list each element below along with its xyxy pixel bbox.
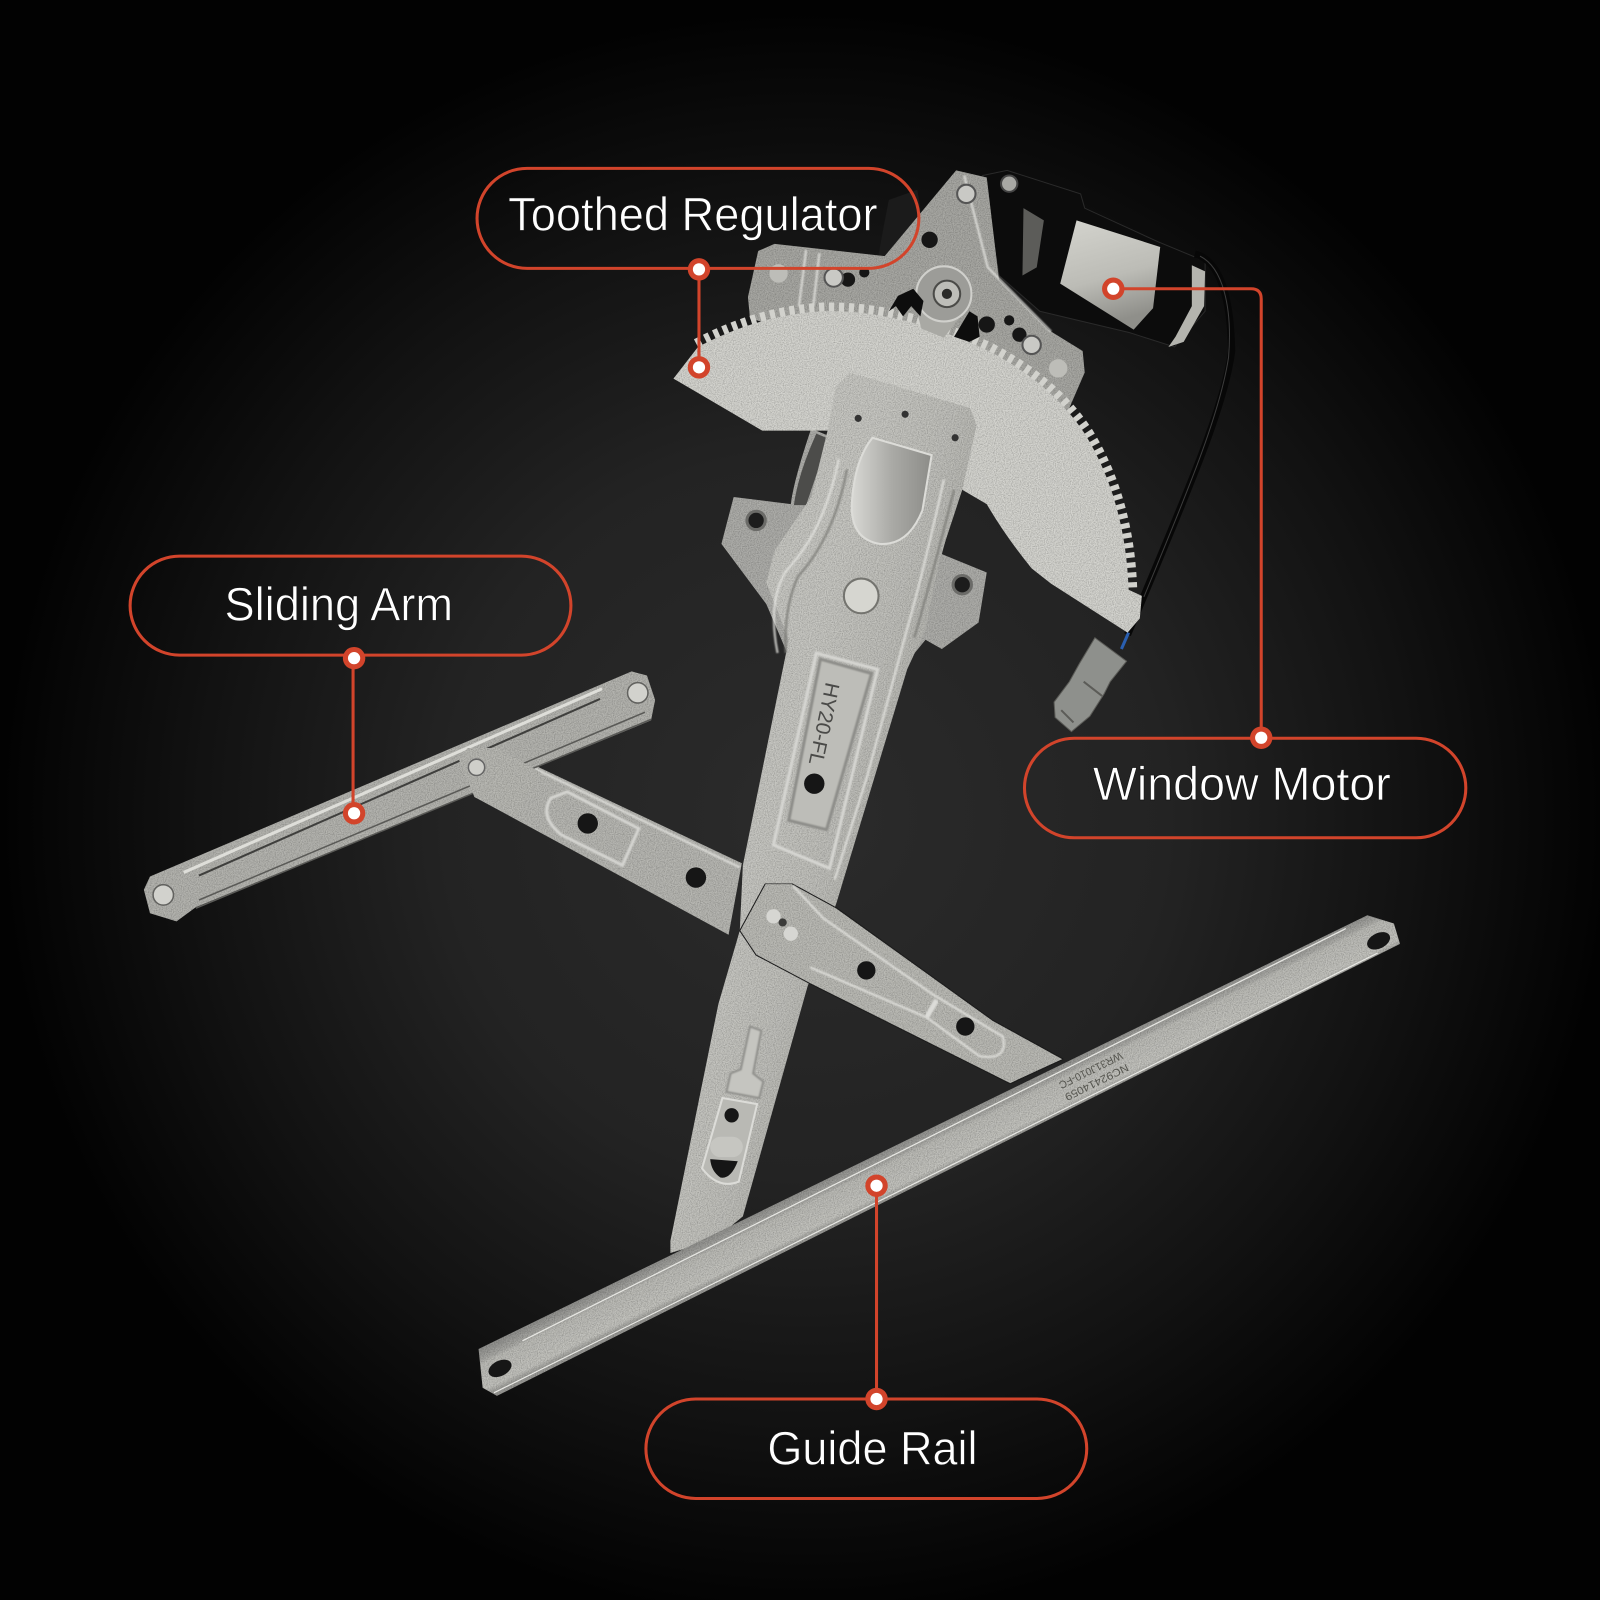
lower back plate with ears	[721, 429, 987, 673]
part: sliding arm rail	[144, 671, 655, 921]
main lift arm	[670, 372, 977, 1253]
callout: Guide Rail: Guide Rail	[767, 1422, 978, 1474]
wire highlight	[1144, 256, 1229, 597]
callout: Guide Rail	[646, 1174, 1087, 1498]
part: cross arm head over sliding rail	[459, 748, 541, 816]
cross arm: rear section	[459, 748, 742, 935]
callout: Sliding Arm	[130, 556, 571, 824]
rivet	[844, 579, 879, 613]
pressed cup	[852, 438, 932, 544]
part: window regulator assembly	[459, 170, 1232, 1253]
callout: Window Motor	[1024, 278, 1466, 838]
callout: Toothed Regulator: Toothed Regulator	[508, 189, 878, 241]
part: guide rail	[479, 915, 1400, 1396]
callout: Sliding Arm: Sliding Arm	[224, 578, 453, 630]
blue wire	[1121, 633, 1129, 649]
toothed gear sector	[673, 311, 1142, 633]
window motor	[878, 170, 1205, 347]
gear hub over sector	[889, 266, 980, 342]
stamped code on rail: NC92414059	[1063, 1061, 1130, 1103]
motor wire	[1128, 254, 1232, 635]
arm side ribs	[774, 459, 944, 880]
lower pressed slot	[727, 1027, 763, 1098]
stamped code on rail: WR31J010-FC	[1057, 1049, 1124, 1091]
bracket plate	[748, 170, 1085, 410]
callout: Toothed Regulator	[477, 168, 919, 379]
inset panel with part number	[789, 659, 871, 830]
callout: Window Motor: Window Motor	[1093, 758, 1391, 810]
main lift arm: HY20-FL	[804, 680, 843, 767]
motor connector plug	[1054, 638, 1127, 732]
cross arm: front section	[740, 884, 1063, 1084]
